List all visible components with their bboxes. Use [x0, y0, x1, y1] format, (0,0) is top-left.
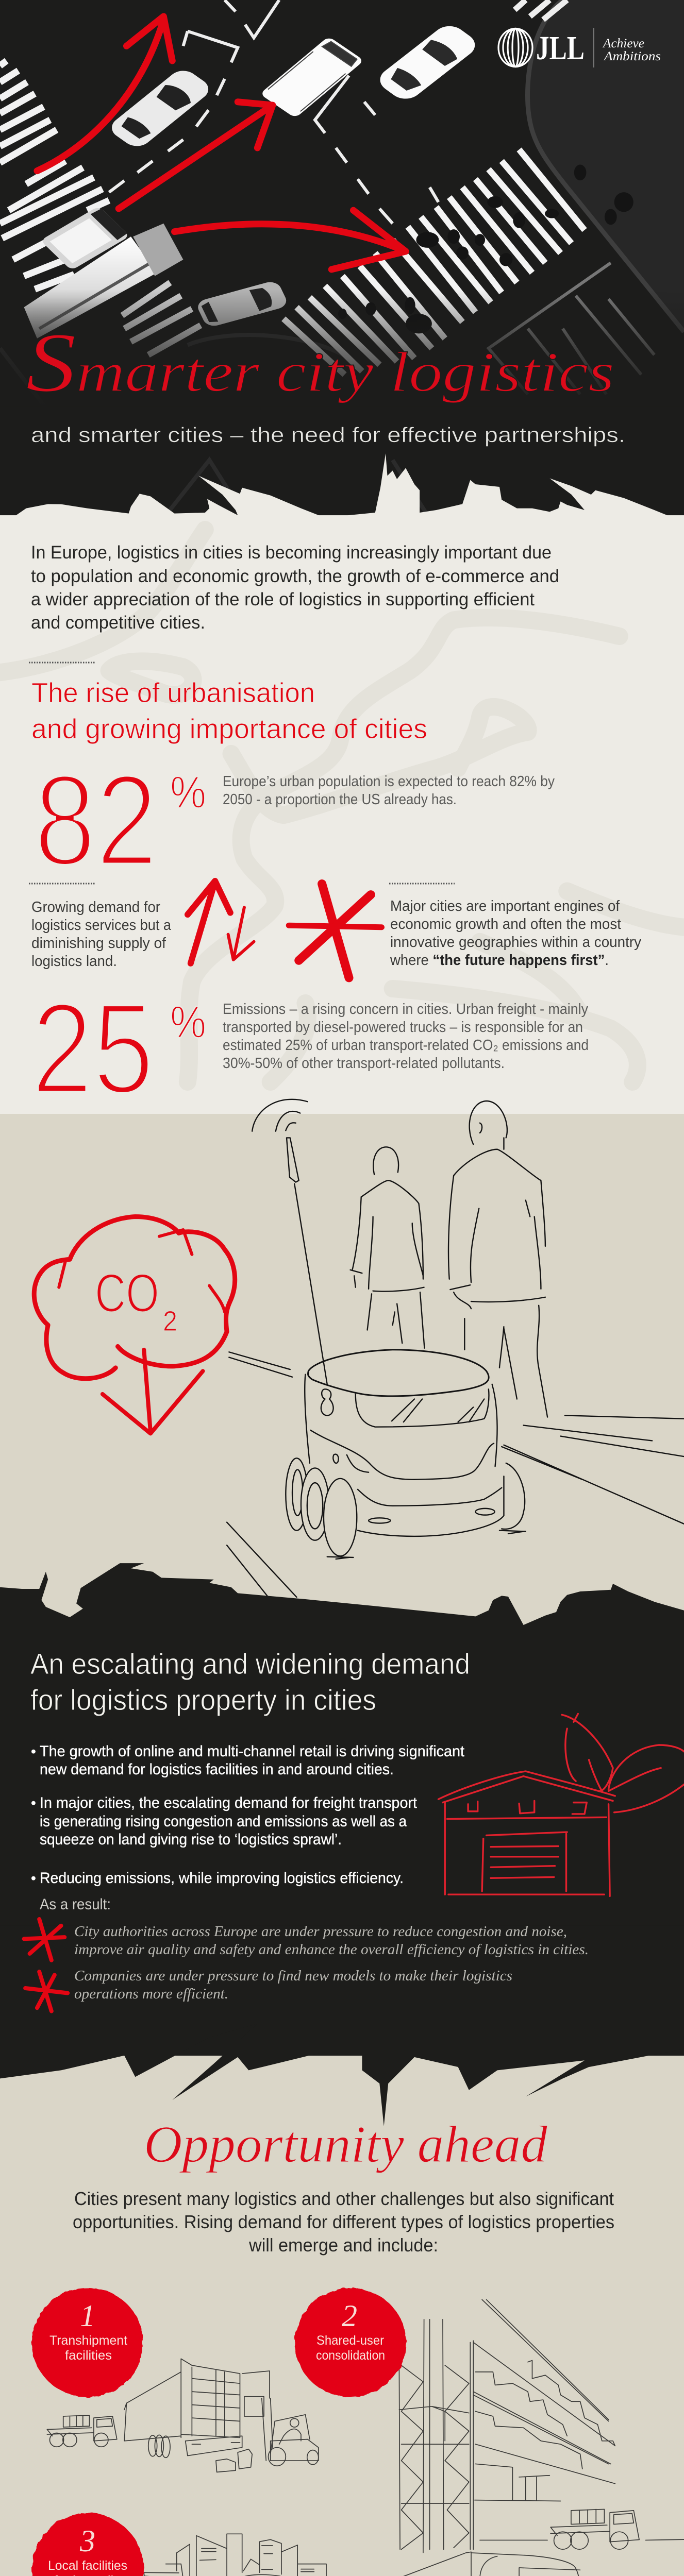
robot body	[308, 1350, 489, 1396]
text block: introduction: a wider appreciation of the role of logistics in supporting efficient	[31, 589, 535, 609]
badge 3: local facilities: Local facilities	[48, 2558, 127, 2573]
torn edge: hero to light section	[0, 453, 684, 526]
text block: major cities: economic growth and often the most	[390, 916, 621, 933]
robot wheels	[286, 1458, 308, 1531]
badge 1: transhipment facilities: 1	[80, 2299, 95, 2333]
person: small figure	[351, 1147, 424, 1348]
pedestrians	[338, 165, 633, 333]
text block: major cities: innovative geographies within a country	[390, 934, 641, 951]
zebra crossing: under truck	[122, 283, 201, 355]
text block: major cities: where “the future happens first”.	[390, 952, 609, 969]
car: white van	[260, 36, 364, 118]
text block: growing demand: diminishing supply of	[31, 935, 166, 952]
text block: bullet points: •	[31, 1870, 36, 1886]
text block: opportunity introduction: will emerge and include:	[248, 2234, 438, 2256]
zebra crossing: large centre right	[283, 149, 585, 375]
text block: second consequence: operations more efficient.	[74, 1986, 228, 2002]
stat: 25 percent: 25	[31, 976, 154, 1121]
illustration: hand truck, parcel, van and city	[110, 2534, 684, 2576]
small truck in yard	[550, 2509, 639, 2549]
stat: 82 percent: Europe’s urban population is expected to reach 82% by	[223, 773, 555, 790]
car: white saloon right	[373, 21, 482, 104]
stat: 82 percent	[34, 748, 555, 893]
badge 3: local facilities: 3	[79, 2524, 95, 2558]
text block: bullet points: In major cities, the escalating demand for freight transport	[40, 1794, 418, 1811]
arrow: red curved up	[37, 16, 172, 171]
stat: 25 percent: estimated 25% of urban transport-related CO₂ emissions and	[223, 1037, 589, 1054]
car: white saloon left	[106, 66, 214, 150]
heading: escalating demand: An escalating and widening demand	[30, 1648, 470, 1681]
stat: 82 percent: %	[170, 767, 206, 818]
text block: second consequence	[74, 1968, 512, 2002]
badge 3: local facilities	[32, 2513, 143, 2576]
heading: escalating demand	[30, 1648, 470, 1717]
text block: second consequence: Companies are under pressure to find new models to make their logistics	[74, 1968, 512, 1984]
city behind	[177, 2534, 326, 2576]
logo: JLL Achieve Ambitions (top): JLL	[536, 29, 585, 67]
panel: dark demand section background	[0, 1563, 684, 2126]
badge 1: transhipment facilities	[32, 2288, 143, 2397]
car: white van near crossing	[40, 206, 130, 270]
text block: growing demand: logistics services but a	[31, 917, 172, 934]
badge 1: transhipment facilities: Transhipment	[49, 2333, 127, 2348]
road markings	[109, 0, 439, 224]
text block: first consequence: improve air quality and safety and enhance the overall efficiency of logistics in cities.	[74, 1941, 589, 1958]
text block: growing demand: Growing demand for	[31, 899, 160, 916]
articulated lorry	[382, 2552, 684, 2576]
badge 1: transhipment facilities: facilities	[65, 2348, 112, 2363]
text block: growing demand	[31, 899, 172, 970]
wifi signal arcs	[252, 1099, 308, 1131]
icon: CO2 cloud with down arrow	[34, 1216, 235, 1433]
heading: rise of urbanisation: and growing importance of cities	[31, 714, 427, 744]
van	[214, 2574, 348, 2576]
arrow: red curved right	[175, 210, 406, 269]
logo: JLL Achieve Ambitions (top)	[498, 28, 661, 67]
faint triangles	[166, 460, 427, 515]
text block: major cities	[390, 898, 641, 969]
stat: 25 percent: Emissions – a rising concern in cities. Urban freight - mainly	[223, 1001, 588, 1018]
icon: CO2 cloud with down arrow: 2	[163, 1305, 177, 1337]
icon: asterisk bullet one	[24, 1919, 64, 1960]
zebra crossing: top left	[0, 61, 57, 163]
logo: JLL Achieve Ambitions (top): Achieve	[602, 37, 644, 50]
icon: up and down arrows	[188, 881, 254, 963]
panel: light section watermark strokes	[0, 530, 684, 1082]
text block: introduction: to population and economic growth, the growth of e-commerce and	[31, 566, 559, 586]
car: grey saloon	[195, 280, 289, 328]
subtitle: and smarter cities – the need for effective partnerships.	[31, 423, 625, 447]
badge 2: shared-user consolidation: consolidation	[316, 2348, 385, 2363]
hand truck	[144, 2564, 201, 2576]
text block: bullet points: The growth of online and multi-channel retail is driving significant	[40, 1743, 465, 1760]
text block: bullet points: •	[31, 1743, 36, 1759]
icon: CO2 cloud with down arrow: CO	[95, 1263, 159, 1324]
stat: 25 percent: transported by diesel-powered trucks – is responsible for an	[223, 1019, 583, 1036]
stat: 25 percent: %	[170, 996, 206, 1047]
panel: hero photo of a city intersection	[0, 0, 684, 515]
icon: warehouse with leaves	[439, 1714, 684, 1896]
text block: bullet points: squeeze on land giving rise to ‘logistics sprawl’.	[40, 1831, 342, 1848]
person: tall figure	[448, 1101, 547, 1417]
badge 2: shared-user consolidation: Shared-user	[316, 2333, 384, 2348]
badge 2: shared-user consolidation	[295, 2288, 406, 2397]
icon: red asterisk	[289, 884, 382, 978]
text block: bullet points	[31, 1743, 465, 1913]
text block: bullet points: new demand for logistics facilities in and around cities.	[40, 1761, 394, 1778]
stat: 82 percent: 2050 - a proportion the US already has.	[223, 791, 457, 808]
logo: JLL Achieve Ambitions (top): Ambitions	[603, 49, 661, 63]
antenna	[287, 1138, 327, 1384]
forklift	[244, 2397, 319, 2466]
text block: bullet points: As a result:	[40, 1896, 111, 1913]
shelves	[110, 2572, 229, 2576]
illustration: warehouse racking	[399, 2300, 684, 2553]
illustration: delivery robot and two pedestrians	[227, 1099, 684, 1597]
text block: opportunity introduction	[73, 2188, 614, 2256]
text block: bullet points: is generating rising congestion and emissions as well as a	[40, 1813, 407, 1830]
illustration: transhipment lorry and forklift	[47, 2359, 319, 2472]
text block: introduction: In Europe, logistics in cities is becoming increasingly important due	[31, 543, 552, 563]
icon: asterisk bullet two	[25, 1972, 68, 2011]
stat: 82 percent: 82	[34, 748, 158, 893]
truck: white lorry	[24, 224, 183, 338]
text block: bullet points: •	[31, 1795, 36, 1811]
text block: introduction	[31, 543, 559, 633]
road arrows and lanes	[489, 263, 654, 394]
arrow: red straight	[119, 102, 273, 209]
text block: first consequence: City authorities across Europe are under pressure to reduce congestion and noise,	[74, 1923, 567, 1940]
stat: 25 percent: 30%-50% of other transport-related pollutants.	[223, 1055, 505, 1072]
heading: rise of urbanisation	[31, 677, 427, 744]
heading: rise of urbanisation: The rise of urbanisation	[31, 677, 315, 708]
badge 2: shared-user consolidation: 2	[342, 2299, 357, 2333]
gradient fade into dark	[0, 289, 684, 408]
text block: introduction: and competitive cities.	[31, 613, 205, 633]
stat: 25 percent	[31, 976, 589, 1121]
small truck	[47, 2415, 117, 2447]
text block: first consequence	[74, 1923, 589, 1958]
pavement lines	[227, 1352, 684, 1597]
heading: escalating demand: for logistics property in cities	[30, 1684, 376, 1717]
heading: opportunity ahead: Opportunity ahead	[144, 2115, 548, 2174]
open trailer	[124, 2359, 270, 2458]
text block: opportunity introduction: Cities present many logistics and other challenges but also significant	[74, 2188, 614, 2209]
text block: growing demand: logistics land.	[31, 953, 117, 970]
zebra crossing: left	[0, 161, 109, 289]
title: Smarter city logistics	[26, 315, 614, 410]
text block: bullet points: Reducing emissions, while improving logistics efficiency.	[40, 1870, 404, 1887]
cardboard boxes	[216, 2449, 252, 2472]
text block: opportunity introduction: opportunities. Rising demand for different types of logistics properties	[73, 2211, 614, 2232]
text block: major cities: Major cities are important engines of	[390, 898, 620, 914]
